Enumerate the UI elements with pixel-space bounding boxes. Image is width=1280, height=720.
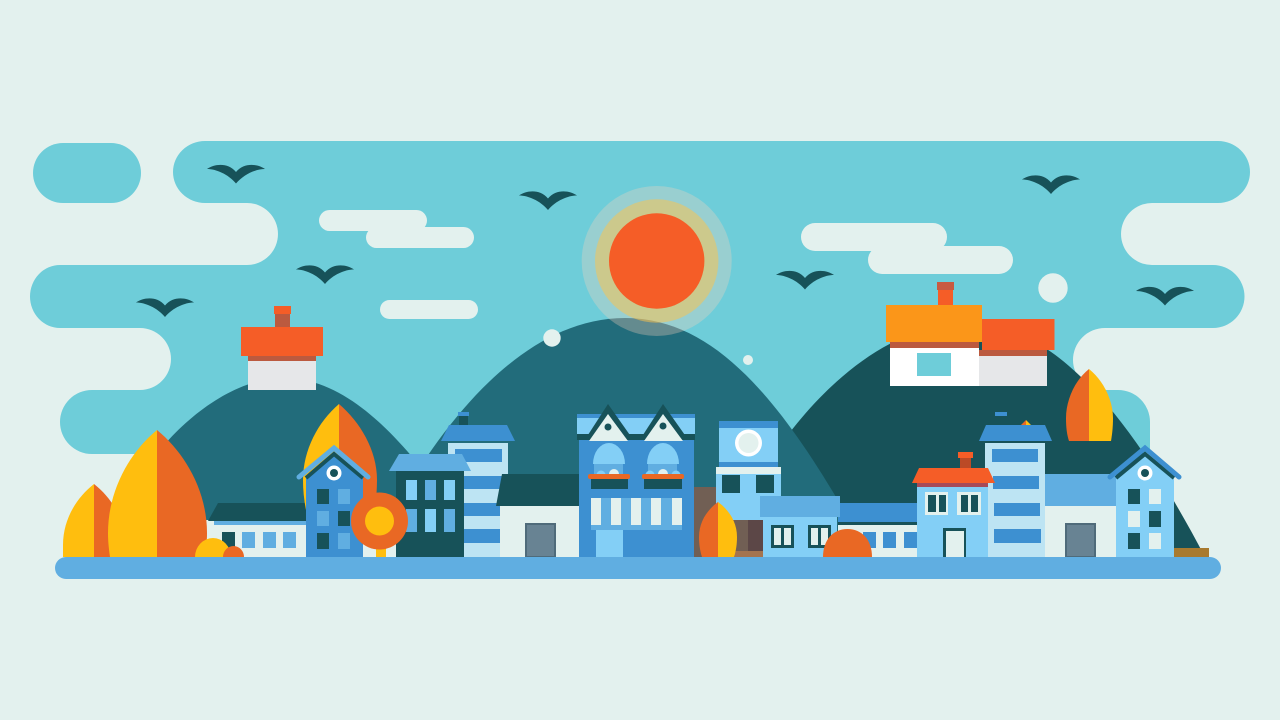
bushes left [195, 538, 244, 557]
orange bush [823, 529, 872, 557]
ground strip [55, 557, 1221, 579]
tree behind blue house [303, 404, 377, 510]
hilltop house right [886, 282, 1054, 386]
floating circles near sun [543, 329, 753, 365]
hilltop house left [241, 306, 323, 390]
tree tip behind tower [1021, 420, 1031, 425]
pale wall behind circle tree [363, 540, 397, 557]
circle tree [351, 492, 408, 557]
tree: small left [63, 484, 125, 557]
tree: right on hill [1066, 369, 1113, 441]
tree: large left [108, 430, 207, 557]
left hill [145, 378, 430, 557]
small house [760, 496, 840, 557]
white house with dark roof [496, 474, 584, 557]
sun [582, 186, 732, 336]
sky cloud band [30, 141, 1250, 520]
brown ground patch [1174, 548, 1209, 557]
birds [136, 165, 1194, 317]
centre hill [400, 318, 870, 557]
striped tower right [979, 412, 1052, 557]
striped tower left [441, 412, 515, 557]
white house with blue roof [1045, 474, 1116, 557]
right hill [770, 324, 1205, 557]
tree: centre [699, 502, 737, 557]
main blue building [577, 404, 695, 557]
blue house right [1110, 448, 1179, 557]
sky pill: upper left [33, 143, 141, 203]
long house [838, 503, 918, 557]
white clouds [319, 210, 1013, 319]
blue house left [299, 448, 368, 557]
floating circles [1038, 273, 1068, 303]
clock tower [694, 421, 781, 557]
colonnade [591, 498, 682, 557]
balcony windows [588, 443, 684, 489]
low house [208, 503, 307, 557]
red roof house [912, 452, 995, 557]
dark building [389, 454, 471, 557]
gables [586, 404, 687, 441]
